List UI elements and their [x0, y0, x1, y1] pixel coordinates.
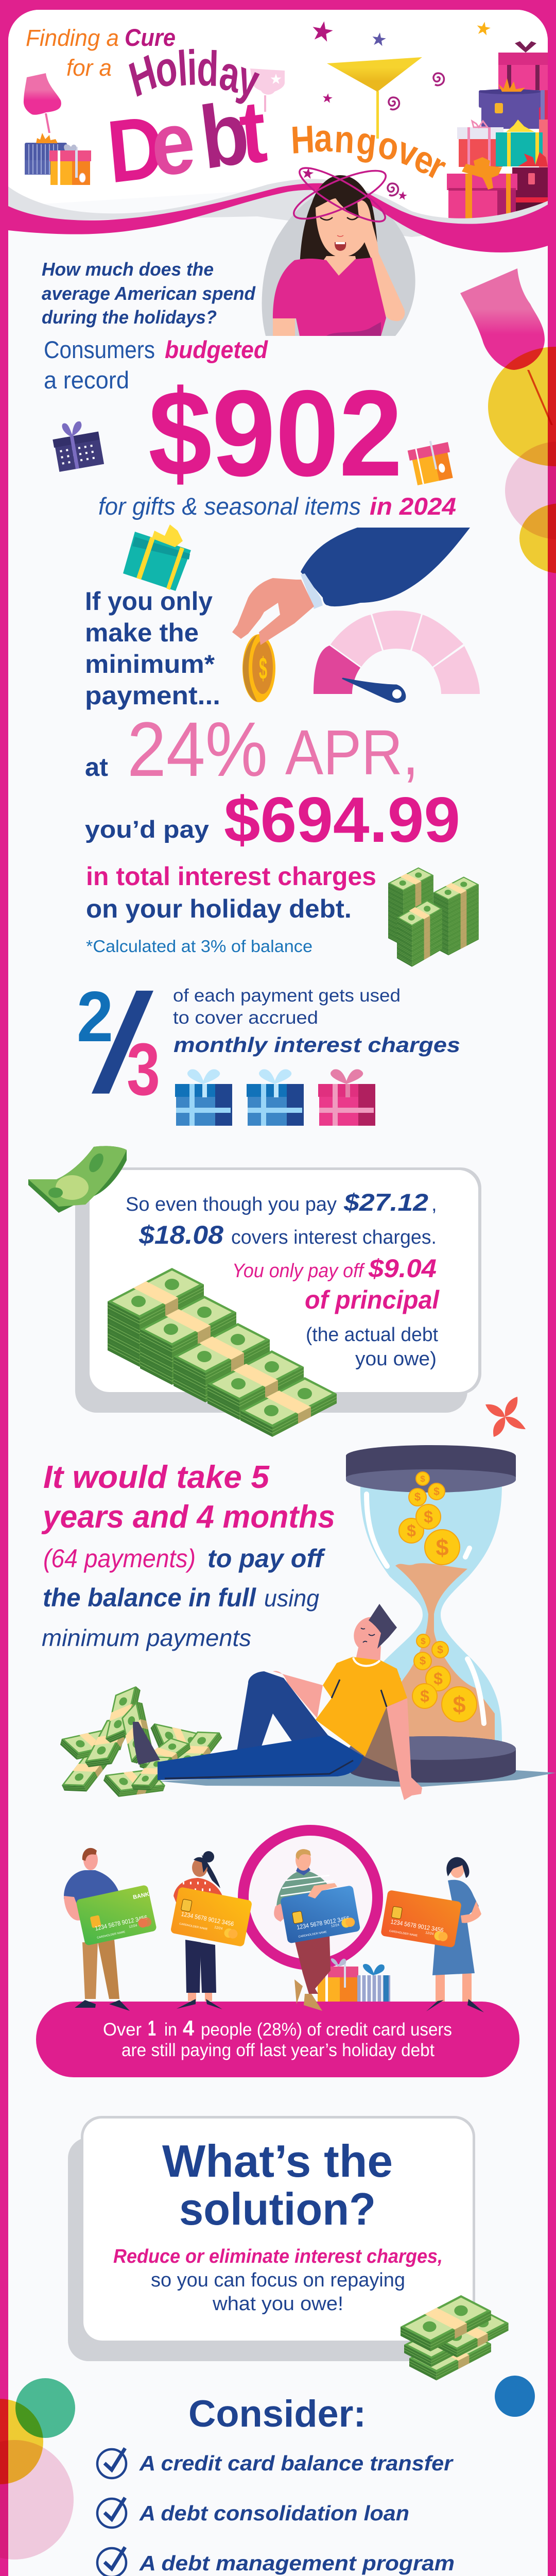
title: Finding a	[26, 25, 119, 51]
money staircase	[108, 1268, 337, 1437]
two thirds text: monthly interest charges	[173, 1033, 460, 1057]
two thirds text: to cover accrued	[173, 1008, 318, 1028]
24% APR	[85, 706, 419, 792]
person: man with blue card: 12/24	[331, 1923, 340, 1928]
coins	[399, 1472, 477, 1722]
breakdown text: So even though you pay	[126, 1194, 337, 1215]
breakdown text: (the actual debt	[306, 1324, 438, 1346]
gift: blue 2	[247, 1069, 304, 1126]
gift: blue 1	[175, 1069, 232, 1126]
title: Debt	[103, 81, 270, 202]
banner	[36, 2002, 519, 2077]
person: woman with yellow card: CARDHOLDER NAME	[179, 1922, 208, 1931]
pink wave	[8, 183, 548, 252]
header gift stack	[447, 41, 548, 221]
banner: in	[164, 2020, 177, 2040]
coins: $	[421, 1636, 426, 1646]
person: man with blue card	[274, 1849, 360, 2011]
text: payoff time	[41, 1460, 335, 1651]
person: man with green card: BANK	[132, 1891, 150, 1901]
header white background	[8, 10, 548, 227]
question	[42, 259, 256, 328]
text: payoff time: to pay off	[207, 1544, 325, 1573]
coins: $	[453, 1691, 466, 1718]
breakdown text: You only pay off	[232, 1260, 365, 1282]
check item 3	[97, 2547, 455, 2576]
person: woman with yellow card	[170, 1851, 252, 2009]
relaxing man	[133, 1604, 422, 1800]
banner: Over	[103, 2020, 142, 2040]
person: man with green card: CARDHOLDER NAME	[97, 1930, 126, 1940]
text: payoff time: years and 4 months	[41, 1499, 335, 1535]
gauge	[314, 611, 480, 702]
flower: coral	[485, 1397, 526, 1437]
money bundles	[401, 2295, 509, 2380]
consumers budgeted: budgeted	[165, 336, 268, 363]
title: Holiday	[124, 38, 264, 110]
title: Hangover	[290, 116, 453, 189]
solution text: what you owe!	[212, 2293, 343, 2315]
if you only: payment...	[85, 681, 220, 710]
check item 2: A debt consolidation loan	[139, 2501, 409, 2525]
person: woman with yellow card: 12/24	[214, 1926, 223, 1931]
breakdown text	[126, 1189, 440, 1370]
coins: $	[420, 1474, 425, 1484]
coins: $	[436, 1534, 449, 1561]
curved bill	[28, 1146, 127, 1213]
text: payoff time: the balance in full	[43, 1583, 256, 1612]
woman gray backdrop	[262, 189, 415, 336]
breakdown text: $18.08	[138, 1221, 223, 1249]
coins: $	[420, 1687, 429, 1705]
total interest	[86, 862, 376, 923]
person: woman with red card: CARDHOLDER NAME	[389, 1929, 418, 1938]
consumers budgeted: a record	[44, 366, 129, 394]
glass: yellow martini	[327, 57, 422, 139]
gray wave	[8, 179, 548, 237]
stars and spirals	[282, 20, 492, 226]
you'd pay: you’d pay	[85, 816, 209, 843]
if you only	[85, 587, 220, 710]
fraction 2/3: /	[92, 965, 154, 1122]
gift: teal	[123, 524, 191, 591]
highlight ring	[243, 1830, 378, 1965]
person: man with green card	[64, 1848, 157, 2011]
person: woman with yellow card: 1234 5678 9012 3456	[181, 1910, 235, 1928]
hourglass	[158, 1445, 556, 1787]
coins: $	[420, 1654, 426, 1667]
footnote: *Calculated at 3% of balance	[86, 937, 312, 956]
breakdown text: ,	[431, 1194, 437, 1215]
title: Cure	[125, 24, 176, 51]
two thirds text: of each payment gets used	[173, 986, 401, 1006]
title	[26, 24, 453, 202]
dizzy rings	[288, 160, 391, 230]
banner: people (28%) of credit card users	[201, 2020, 452, 2040]
24% APR: at	[85, 753, 108, 782]
question: average American spend	[42, 283, 256, 304]
if you only: minimum*	[85, 650, 215, 679]
question: How much does the	[42, 259, 214, 280]
check item 1: A credit card balance transfer	[139, 2451, 454, 2475]
gift: polka	[50, 418, 104, 472]
panel: solution	[68, 2116, 475, 2361]
for gifts line: for gifts & seasonal items	[98, 493, 361, 520]
banner: are still paying off last year’s holiday debt	[121, 2040, 435, 2060]
breakdown text: of principal	[305, 1285, 440, 1314]
person: woman with red card: 12/24	[425, 1931, 434, 1936]
if you only: make the	[85, 618, 199, 647]
check item 2	[97, 2498, 409, 2528]
question: during the holidays?	[42, 307, 217, 328]
fraction 2/3: 3	[127, 1028, 160, 1111]
solution text	[113, 2246, 443, 2315]
glass: pale	[250, 69, 285, 112]
coins: $	[433, 1669, 443, 1688]
solution heading: What’s the	[162, 2136, 393, 2187]
gift: orange	[407, 437, 456, 486]
header gifts left	[25, 133, 91, 185]
two thirds text	[173, 986, 460, 1057]
breakdown text: covers interest charges.	[231, 1227, 437, 1248]
text: payoff time: using	[264, 1585, 319, 1612]
woman with headache	[273, 175, 405, 336]
check item 1	[97, 2448, 454, 2478]
person: woman with red card: 1234 5678 9012 3456	[390, 1918, 444, 1934]
breakdown text: $27.12	[343, 1189, 428, 1216]
banner: 1	[148, 2016, 156, 2040]
solution heading: solution?	[179, 2183, 376, 2234]
24% APR: APR,	[285, 718, 419, 788]
gifts on banner	[316, 1958, 390, 2002]
text: payoff time: minimum payments	[42, 1624, 251, 1651]
title: for a	[66, 55, 112, 81]
person: man with blue card: CARDHOLDER NAME	[298, 1930, 327, 1939]
person: man with green card: 1234 5678 9012 3456	[94, 1913, 148, 1932]
solution text: so you can focus on repaying	[151, 2269, 405, 2291]
coins: $	[414, 1490, 421, 1503]
coins: $	[424, 1507, 433, 1526]
money pile	[53, 1680, 231, 1810]
coins: $	[433, 1486, 440, 1498]
person: woman with red card	[380, 1857, 484, 2012]
hand with coin: $	[259, 651, 267, 686]
solution text: Reduce or eliminate interest charges,	[113, 2246, 443, 2267]
person: man with green card: 12/24	[129, 1924, 138, 1929]
breakdown text: you owe)	[355, 1348, 437, 1370]
banner: 4	[183, 2016, 195, 2040]
glass: pink	[24, 73, 61, 133]
person: man with blue card: 1234 5678 9012 3456	[296, 1914, 350, 1931]
total interest: in total interest charges	[86, 862, 376, 891]
text: payoff time: It would take 5	[43, 1460, 270, 1495]
fraction 2/3: 2	[77, 977, 113, 1057]
coins: $	[407, 1521, 416, 1540]
24% APR: 24%	[127, 706, 268, 792]
deco circles left	[0, 2378, 75, 2560]
gift: pink	[318, 1069, 375, 1126]
consumers budgeted	[44, 336, 268, 394]
deco circle blue	[495, 2376, 535, 2417]
you'd pay: $694.99	[224, 785, 460, 856]
fraction 2/3	[77, 965, 160, 1122]
coins: $	[437, 1644, 443, 1656]
text: payoff time: (64 payments)	[43, 1544, 196, 1573]
if you only: If you only	[85, 587, 213, 616]
panel: payment breakdown	[75, 1167, 481, 1413]
total interest: on your holiday debt.	[86, 894, 352, 923]
stat: $902: $902	[148, 365, 403, 502]
breakdown text: $9.04	[368, 1254, 437, 1283]
solution heading	[162, 2136, 393, 2234]
consider heading: Consider:	[188, 2393, 366, 2435]
hand with coin	[232, 528, 470, 702]
money stacks	[388, 867, 479, 967]
for gifts line: in 2024	[370, 493, 456, 520]
you'd pay	[85, 785, 460, 856]
consumers budgeted: Consumers	[44, 336, 155, 363]
deco circles and glass right	[460, 268, 556, 573]
check item 3: A debt management program	[139, 2551, 455, 2575]
